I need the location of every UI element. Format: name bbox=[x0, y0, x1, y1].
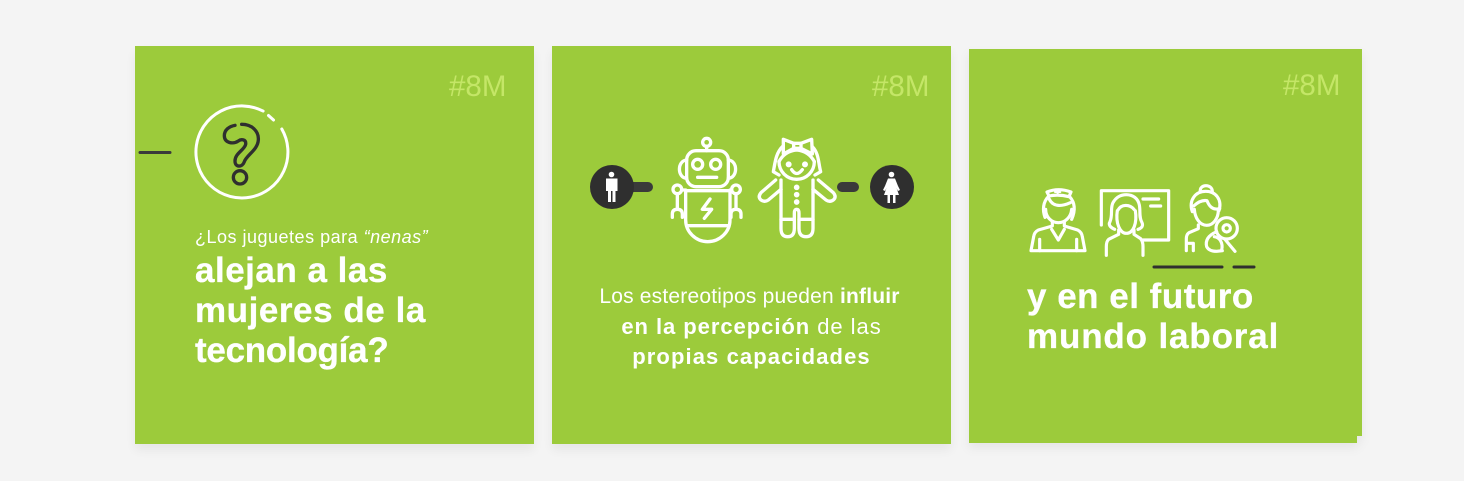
panel: juguetes question bbox=[135, 46, 534, 444]
heading: alejan a las bbox=[195, 251, 388, 290]
intro text: ¿Los juguetes para “nenas” bbox=[195, 227, 428, 247]
dark dashes under icons bbox=[1154, 266, 1254, 268]
hashtag: #8M bbox=[1283, 69, 1340, 102]
dash left of question icon bbox=[140, 151, 170, 154]
icon: man badge with connector bbox=[590, 165, 653, 209]
body text bbox=[599, 285, 900, 369]
body text: en la percepción de las bbox=[621, 314, 882, 339]
heading: mujeres de la bbox=[195, 291, 426, 330]
icon: nurse bbox=[1031, 190, 1085, 251]
heading: mundo laboral bbox=[1027, 317, 1279, 356]
icon: robot bbox=[672, 138, 741, 242]
heading bbox=[195, 251, 426, 370]
panel: estereotipos bbox=[552, 46, 951, 444]
icon: question mark in circle bbox=[196, 106, 288, 198]
hashtag: #8M bbox=[449, 70, 506, 103]
icon: teacher at board bbox=[1101, 191, 1169, 255]
heading: y en el futuro bbox=[1027, 277, 1254, 316]
icon: woman badge with connector bbox=[837, 165, 914, 209]
body text: Los estereotipos pueden influir bbox=[599, 285, 900, 308]
heading bbox=[1027, 277, 1279, 356]
body text: propias capacidades bbox=[632, 344, 871, 369]
icon: doll bbox=[759, 139, 835, 237]
hashtag: #8M bbox=[872, 70, 929, 103]
icon: woman with baby bbox=[1186, 186, 1237, 251]
heading: tecnología? bbox=[195, 331, 388, 370]
panel: mundo laboral bbox=[969, 49, 1362, 447]
panel background with notch bbox=[969, 49, 1362, 443]
